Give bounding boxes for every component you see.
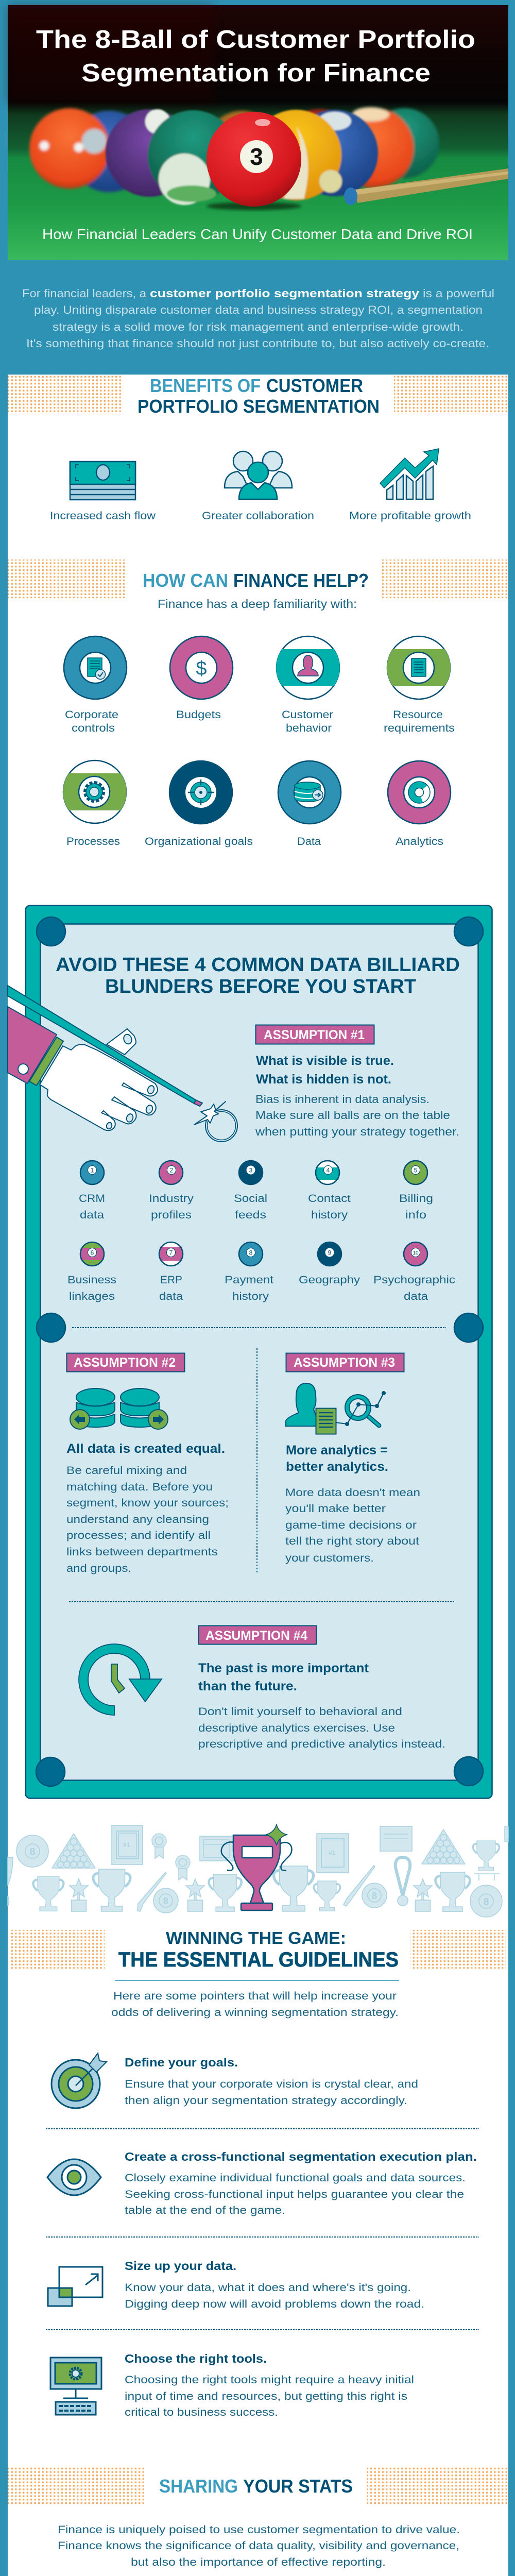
- bold claim: What is visible is true.: [256, 1054, 394, 1068]
- label: Customer: [282, 709, 333, 721]
- illustration: band of pale trophies and billiard icons: [8, 1824, 508, 1917]
- assumption 2: [66, 1353, 229, 1574]
- intro paragraph: For financial leaders, a: [22, 287, 147, 300]
- icon: donut chart: [388, 761, 451, 824]
- ball: billing info: 5: [414, 1166, 418, 1174]
- table frame: [26, 906, 492, 1798]
- intro paragraph: [22, 287, 494, 350]
- body text: Choosing the right tools might require a heavy initial: [125, 2374, 414, 2386]
- ball: billing info: [399, 1161, 433, 1221]
- body text: Know your data, what it does and where's it's going.: [125, 2282, 411, 2294]
- heading: sharing your stats: SHARING: [159, 2476, 238, 2497]
- ball: payment history: Payment: [225, 1274, 273, 1286]
- label: behavior: [286, 722, 332, 734]
- ball: industry profiles: profiles: [151, 1209, 192, 1221]
- icon: resize frames: [48, 2267, 102, 2306]
- bold claim: All data is created equal.: [66, 1442, 225, 1456]
- sharing intro text: but also the importance of effective reporting.: [131, 2556, 386, 2568]
- body text: processes; and identify all: [66, 1530, 211, 1541]
- panel: billiard table with common data blunders: [8, 906, 492, 1798]
- label: Increased cash flow: [50, 510, 156, 522]
- ball: psychographic data: [373, 1242, 455, 1302]
- intro paragraph: strategy is a solid move for risk management and enterprise-wide growth.: [53, 320, 464, 333]
- body text: then align your segmentation strategy accordingly.: [125, 2095, 407, 2107]
- illustration: hand with pool cue striking ball: [8, 986, 237, 1142]
- ball: business linkages: linkages: [69, 1291, 115, 1302]
- icon: eye: [47, 2159, 101, 2195]
- ball: contact history: 4: [327, 1166, 330, 1174]
- body text: Bias is inherent in data analysis.: [255, 1093, 430, 1106]
- ball: ERP data: ERP: [160, 1274, 182, 1286]
- body text: Be careful mixing and: [66, 1465, 187, 1477]
- body text: segment, know your sources;: [66, 1497, 229, 1509]
- label: Data: [297, 836, 321, 848]
- illustration: band of pale trophies and billiard icons: 8: [372, 1891, 377, 1901]
- heading: winning the game: [9, 1928, 506, 1971]
- body text: [198, 1706, 445, 1750]
- label: Analytics: [396, 836, 443, 848]
- heading: avoid these 4 blunders: [56, 954, 460, 997]
- bold claim: [198, 1661, 369, 1693]
- label: requirements: [384, 722, 455, 734]
- ball: social feeds: feeds: [235, 1209, 266, 1221]
- sleeve: [8, 1007, 57, 1083]
- icon: person, document and magnifier with data line: [286, 1383, 386, 1434]
- pool cue: [8, 986, 196, 1104]
- intro paragraph: is a powerful: [423, 287, 494, 300]
- title: [36, 26, 475, 87]
- ball: contact history: [308, 1161, 351, 1221]
- body text: Digging deep now will avoid problems down the road.: [125, 2298, 424, 2310]
- ball: psychographic data: data: [404, 1291, 428, 1302]
- title: Define your goals.: [125, 2056, 238, 2069]
- label: [384, 709, 455, 734]
- icon: person silhouette: [276, 636, 340, 699]
- icon: dollar sign: [170, 636, 233, 699]
- ball: social feeds: Social: [234, 1193, 267, 1205]
- ball: psychographic data: Psychographic: [373, 1274, 455, 1286]
- icon: dollar sign: $: [196, 658, 207, 680]
- heading: how can finance help: FINANCE HELP?: [233, 570, 369, 591]
- ball: CRM data: 1: [91, 1166, 94, 1174]
- body text: [125, 2374, 414, 2418]
- ball: payment history: [225, 1242, 273, 1302]
- ball: payment history: 8: [249, 1249, 253, 1256]
- ball: social feeds: [234, 1161, 267, 1221]
- bold claim: than the future.: [198, 1679, 297, 1693]
- badge: [255, 1025, 374, 1044]
- subtitle: How Financial Leaders Can Unify Customer Data and Drive ROI: [42, 226, 473, 242]
- intro paragraph: play. Uniting disparate customer data and business strategy ROI, a segmentation: [34, 303, 483, 316]
- icon: database: [278, 761, 341, 824]
- table pockets: [36, 917, 483, 1786]
- body text: Ensure that your corporate vision is crystal clear, and: [125, 2078, 418, 2090]
- body text: your customers.: [285, 1552, 374, 1564]
- item: customer behavior: [276, 636, 340, 734]
- heading: benefits of customer portfolio segmentation: [8, 375, 508, 417]
- data source balls: [67, 1161, 455, 1302]
- icon: target with arrow: [52, 2053, 107, 2108]
- subheading: Finance has a deep familiarity with:: [158, 597, 357, 611]
- body text: matching data. Before you: [66, 1481, 213, 1493]
- table felt: [40, 924, 478, 1781]
- benefit: more profitable growth: [349, 449, 471, 522]
- title: The 8-Ball of Customer Portfolio: [36, 26, 475, 54]
- body text: critical to business success.: [125, 2406, 278, 2418]
- body text: More data doesn't mean: [285, 1487, 420, 1499]
- item: organizational goals: [145, 761, 253, 848]
- label: Organizational goals: [145, 836, 253, 848]
- icon: middle pool balls: [106, 109, 378, 205]
- illustration: band of pale trophies and billiard icons: #1: [329, 1849, 336, 1856]
- illustration: band of pale trophies and billiard icons: 8: [29, 1846, 36, 1858]
- body text: understand any cleansing: [66, 1514, 209, 1526]
- bold claim: More analytics =: [286, 1443, 388, 1458]
- body text: [125, 2172, 466, 2216]
- ball: CRM data: [79, 1161, 105, 1221]
- ball: business linkages: [67, 1242, 116, 1302]
- body text: [125, 2282, 424, 2310]
- label: Greater collaboration: [202, 510, 314, 522]
- body text: tell the right story about: [285, 1535, 419, 1547]
- benefit: greater collaboration: [202, 451, 314, 522]
- title: Create a cross-functional segmentation execution plan.: [125, 2150, 477, 2163]
- title: Size up your data.: [125, 2259, 236, 2273]
- body text: descriptive analytics exercises. Use: [198, 1722, 395, 1734]
- impact spark: [194, 1101, 226, 1125]
- ball: industry profiles: [149, 1161, 194, 1221]
- assumption 3: [285, 1353, 420, 1564]
- sharing intro text: Finance knows the significance of data quality, visibility and governance,: [58, 2540, 459, 2552]
- ball: industry profiles: Industry: [149, 1193, 194, 1205]
- heading: avoid these 4 blunders: AVOID THESE 4 COMMON DATA BILLIARD: [56, 954, 460, 976]
- icon: pool cue: [344, 168, 508, 205]
- ball: social feeds: 3: [249, 1166, 253, 1174]
- ball: billing info: Billing: [399, 1193, 433, 1205]
- bold claim: better analytics.: [286, 1460, 388, 1474]
- heading: sharing your stats: [8, 2466, 508, 2504]
- icon: two databases with arrows: [70, 1388, 168, 1429]
- item: resource requirements: [384, 636, 455, 734]
- badge: ASSUMPTION #2: [74, 1355, 176, 1370]
- ball: ERP data: 7: [169, 1249, 173, 1256]
- guidelines intro text: [111, 1990, 399, 2019]
- hand: [40, 1044, 158, 1130]
- heading: sharing your stats: YOUR STATS: [243, 2476, 353, 2497]
- guidelines intro text: Here are some pointers that will help increase your: [113, 1990, 397, 2002]
- label: controls: [72, 722, 115, 734]
- body text: prescriptive and predictive analytics instead.: [198, 1738, 445, 1750]
- body text: [255, 1093, 459, 1138]
- bold claim: [256, 1054, 394, 1087]
- icon: clock with reverse arrow: [79, 1644, 162, 1715]
- body text: Closely examine individual functional goals and data sources.: [125, 2172, 466, 2184]
- body text: Don't limit yourself to behavioral and: [198, 1706, 402, 1718]
- bold claim: What is hidden is not.: [256, 1072, 391, 1087]
- item: data: [278, 761, 341, 848]
- label: Corporate: [65, 709, 118, 721]
- body text: when putting your strategy together.: [255, 1125, 459, 1138]
- body text: table at the end of the game.: [125, 2205, 285, 2216]
- icon: document with check: [64, 636, 127, 699]
- heading: how can finance help: HOW CAN: [143, 570, 228, 591]
- label: Budgets: [176, 709, 221, 721]
- body text: [285, 1487, 420, 1564]
- body text: you'll make better: [285, 1503, 386, 1515]
- intro paragraph: It's something that finance should not just contribute to, but also actively co-create.: [26, 337, 489, 350]
- body text: input of time and resources, but getting this right is: [125, 2391, 407, 2402]
- icon: group of people: [225, 451, 292, 499]
- body text: links between departments: [66, 1546, 218, 1558]
- heading: winning the game: THE ESSENTIAL GUIDELINES: [118, 1948, 399, 1971]
- badge: ASSUMPTION #3: [294, 1355, 395, 1370]
- label: More profitable growth: [349, 510, 471, 522]
- sharing intro text: [58, 2524, 460, 2568]
- heading: benefits of customer portfolio segmentation: PORTFOLIO SEGMENTATION: [138, 396, 380, 417]
- guidelines intro text: odds of delivering a winning segmentation strategy.: [111, 2007, 399, 2019]
- thumb: [107, 1029, 136, 1055]
- badge: ASSUMPTION #4: [205, 1629, 307, 1643]
- badge: [286, 1353, 404, 1371]
- assumption 4: [79, 1626, 445, 1750]
- ball: billing info: info: [405, 1209, 426, 1221]
- icon: document: [387, 636, 451, 699]
- ball: ERP data: data: [159, 1291, 183, 1302]
- title: Segmentation for Finance: [81, 59, 431, 87]
- guideline: define your goals: [52, 2053, 418, 2108]
- item: budgets: [170, 636, 233, 721]
- label: Resource: [393, 709, 443, 721]
- bold claim: [286, 1443, 388, 1474]
- guideline: choose the right tools: [50, 2352, 414, 2418]
- ball: CRM data: data: [80, 1209, 104, 1221]
- heading: benefits of customer portfolio segmentation: CUSTOMER: [266, 375, 363, 396]
- heading: benefits of customer portfolio segmentation: BENEFITS OF: [150, 375, 261, 396]
- badge: [67, 1353, 184, 1371]
- icon: computer with gear: [50, 2358, 101, 2415]
- ball: geography: [299, 1242, 360, 1286]
- intro paragraph: customer portfolio segmentation strategy: [150, 287, 420, 300]
- ball: ERP data: [159, 1242, 183, 1302]
- body text: [66, 1465, 229, 1574]
- ball: industry profiles: 2: [170, 1166, 174, 1174]
- ball: contact history: history: [311, 1209, 348, 1221]
- icon: growth chart: [380, 449, 439, 499]
- icon: back row of pool balls: [29, 107, 439, 192]
- icon: main magenta trophy: [221, 1824, 292, 1910]
- body text: Seeking cross-functional input helps guarantee you clear the: [125, 2189, 464, 2200]
- guideline: cross-functional plan: [47, 2150, 477, 2216]
- icon: red 3-ball: [207, 112, 301, 210]
- ball: geography: Geography: [299, 1274, 360, 1286]
- icon: red 3-ball: 3: [250, 143, 263, 170]
- guideline: size up your data: [48, 2259, 424, 2310]
- item: analytics: [388, 761, 451, 848]
- icon: cash stack: [70, 462, 135, 500]
- badge: ASSUMPTION #1: [264, 1028, 365, 1042]
- label: Processes: [66, 836, 120, 848]
- heading: how can finance help: [8, 560, 508, 598]
- icon: gear: [63, 760, 127, 823]
- hero panel: billiard balls photo: [8, 5, 508, 260]
- ball ring: [205, 1110, 237, 1142]
- ball: business linkages: Business: [67, 1274, 116, 1286]
- body text: and groups.: [66, 1563, 131, 1574]
- ball: CRM data: CRM: [79, 1193, 105, 1205]
- illustration: band of pale trophies and billiard icons: #1: [123, 1841, 130, 1849]
- ball: contact history: Contact: [308, 1193, 351, 1205]
- title: Choose the right tools.: [125, 2352, 267, 2365]
- body text: game-time decisions or: [285, 1519, 417, 1531]
- ball: payment history: history: [232, 1291, 269, 1302]
- label: [282, 709, 333, 734]
- body text: [125, 2078, 418, 2107]
- ball: business linkages: 6: [91, 1249, 94, 1256]
- illustration: band of pale trophies and billiard icons: 8: [483, 1896, 489, 1908]
- icon: crosshair target: [169, 761, 232, 824]
- label: [65, 709, 118, 734]
- heading: avoid these 4 blunders: BLUNDERS BEFORE YOU START: [105, 976, 416, 997]
- ball: geography: 9: [328, 1249, 332, 1256]
- sharing intro text: Finance is uniquely poised to use customer segmentation to drive value.: [58, 2524, 460, 2536]
- body text: Make sure all balls are on the table: [255, 1109, 450, 1122]
- benefit: increased cash flow: [50, 462, 156, 522]
- heading: winning the game: WINNING THE GAME:: [166, 1928, 346, 1947]
- bold claim: The past is more important: [198, 1661, 369, 1675]
- illustration: band of pale trophies and billiard icons: 8: [163, 1896, 168, 1906]
- assumption 1: [255, 1025, 459, 1138]
- ball: psychographic data: 10: [413, 1250, 419, 1256]
- item: corporate controls: [64, 636, 127, 734]
- item: processes: [63, 760, 127, 848]
- badge: [199, 1626, 316, 1645]
